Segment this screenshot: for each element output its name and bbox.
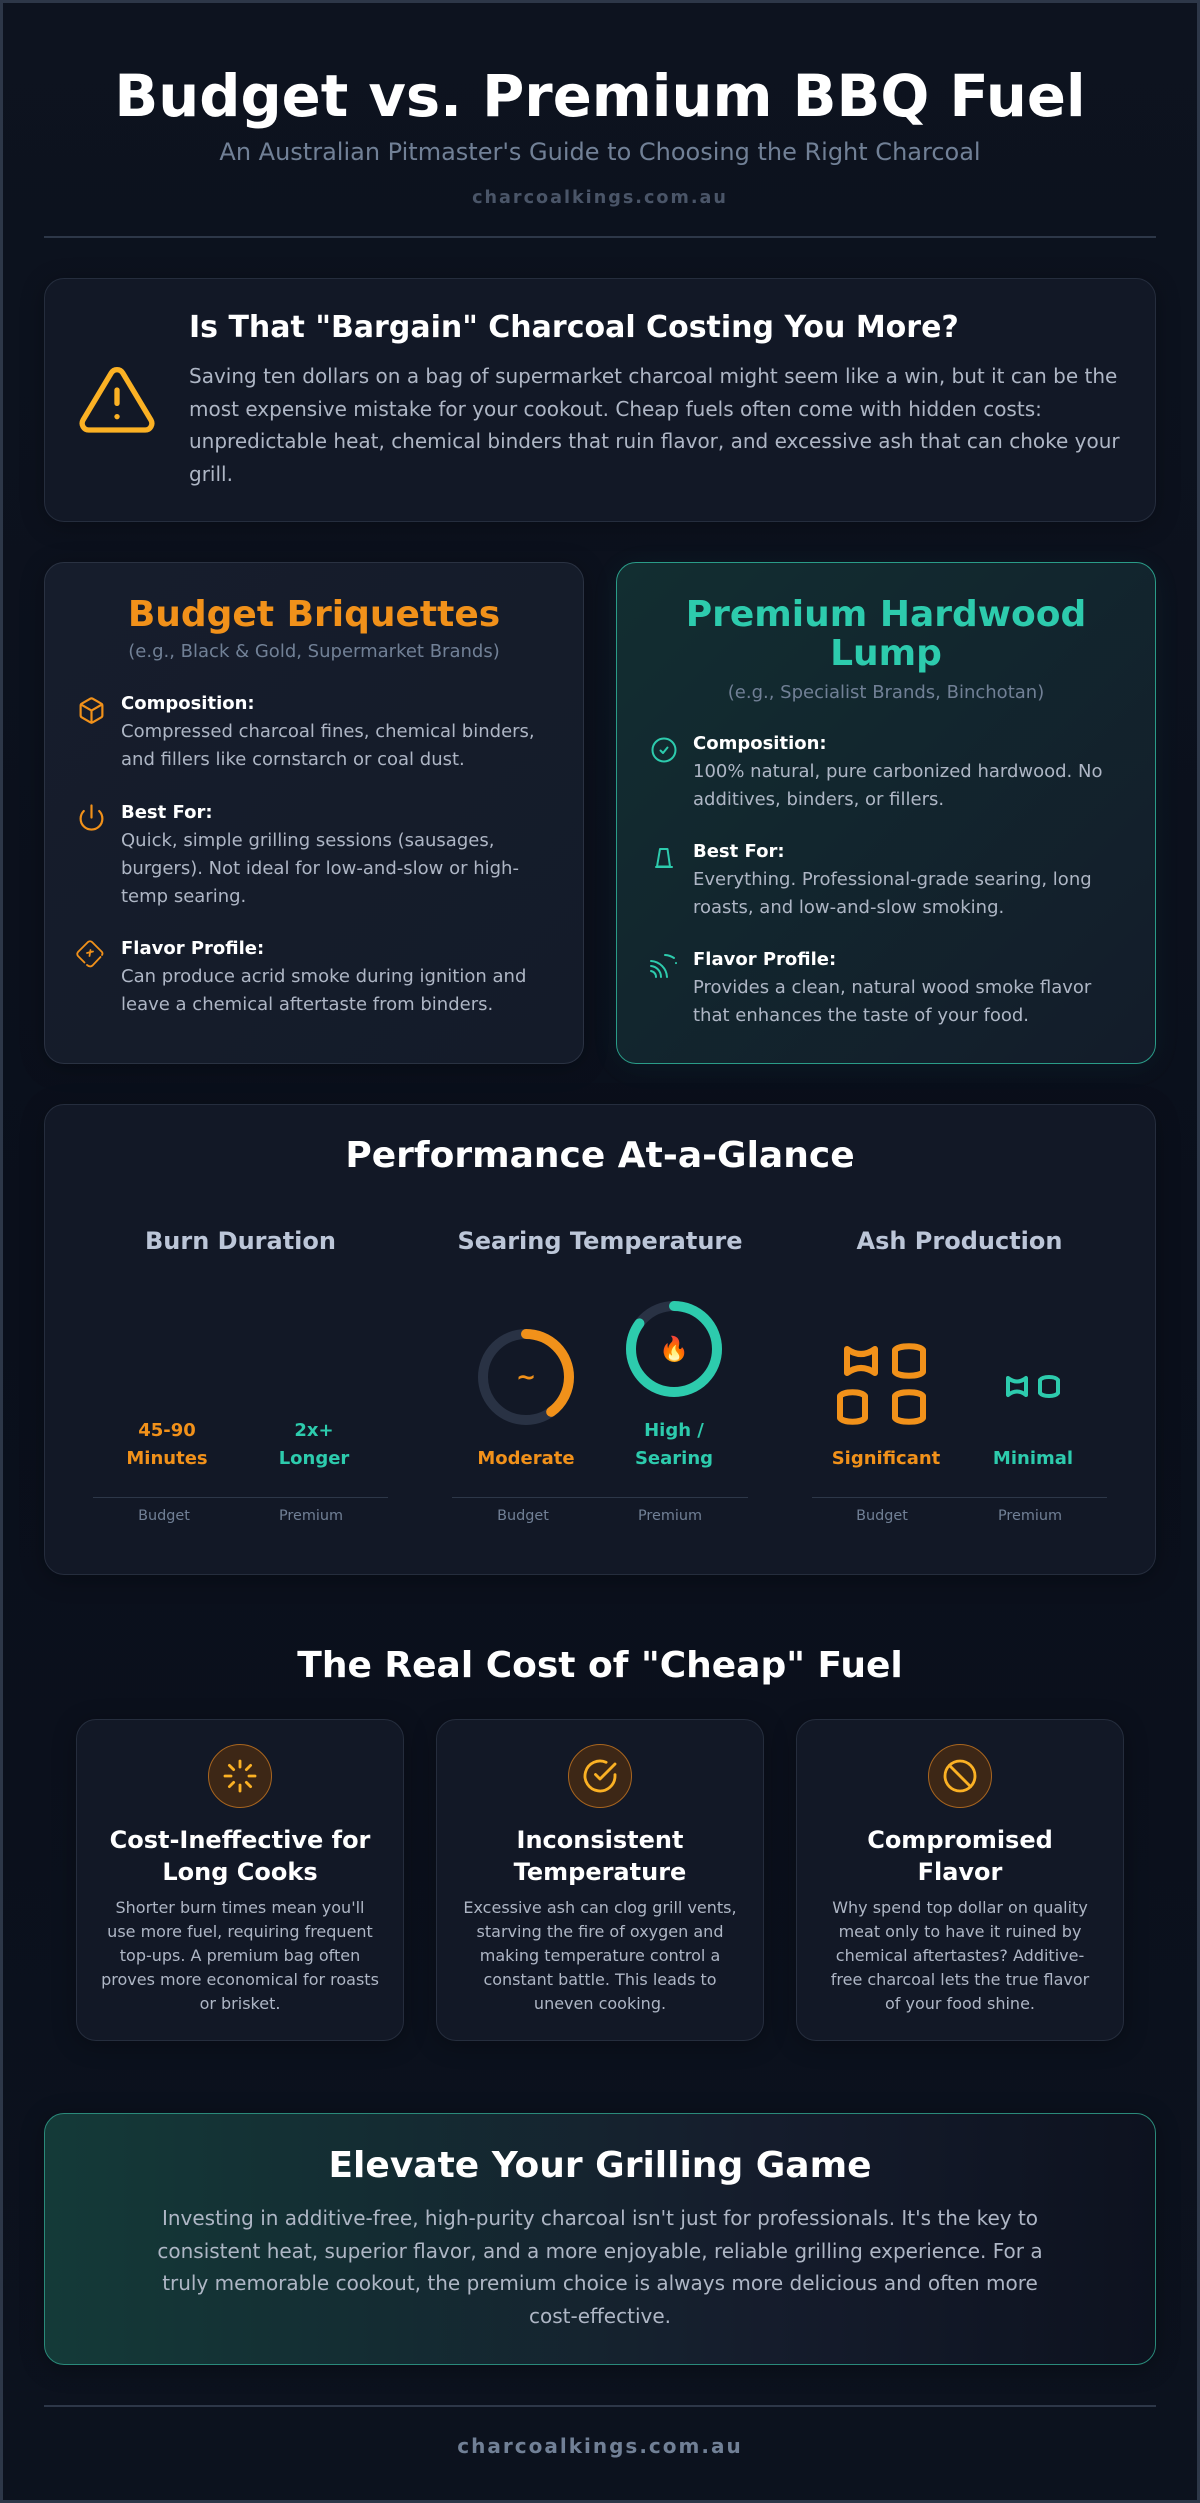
searing premium value [635,1420,713,1469]
card text [831,1898,1090,2013]
card text: chemical aftertastes? Additive- [836,1946,1084,1965]
panel: premium hardwood lump [616,562,1156,1064]
burn premium value [279,1420,350,1469]
card text: Excessive ash can clog grill vents, [463,1898,737,1917]
panel: performance at-a-glance [44,1104,1156,1575]
cta text: cost-effective. [529,2304,671,2328]
icon: power [80,804,104,831]
burn budget value [126,1420,208,1469]
icon: slash circle [928,1744,992,1808]
intro text: most expensive mistake for your cookout. Cheap fuels often come with hidden costs: [189,396,1042,420]
card heading [110,1826,370,1886]
flavor text: that enhances the taste of your food. [693,1005,1029,1026]
premium item: best for [655,841,1092,918]
chart: ash production [812,1227,1107,1524]
card heading: Compromised [867,1826,1053,1854]
premium item: flavor [650,949,1092,1026]
panel: call to action [44,2113,1156,2365]
performance heading: Performance At-a-Glance [345,1135,855,1176]
best for text: temp searing. [121,886,246,907]
flavor text: Can produce acrid smoke during ignition and [121,966,526,987]
panel: inconsistent temperature [436,1719,764,2041]
premium heading [686,594,1086,674]
panel: cost-ineffective [76,1719,404,2041]
panel: compromised flavor [796,1719,1124,2041]
premium heading: Lump [830,633,942,674]
ash heading: Ash Production [856,1227,1062,1255]
card text: top-ups. A premium bag often [120,1946,360,1965]
subtitle: An Australian Pitmaster's Guide to Choosing the Right Charcoal [219,138,981,166]
card text: proves more economical for roasts [101,1970,379,1989]
card text: meat only to have it ruined by [839,1922,1081,1941]
card text: use more fuel, requiring frequent [107,1922,373,1941]
card text [101,1898,379,2013]
gauge: premium high [626,1301,722,1397]
icon: box [80,697,104,724]
icon: loader [208,1744,272,1808]
website label: charcoalkings.com.au [472,188,728,208]
icon: smoke waves [650,954,677,978]
icon: check circle [652,738,676,762]
budget item: flavor [76,938,526,1015]
icon: budget ash chunks [837,1343,926,1425]
gauge symbol: flame: 🔥 [659,1335,689,1363]
card heading: Inconsistent [517,1826,683,1854]
burn budget value: 45-90 [138,1420,196,1441]
flavor text: Flavor Profile: [121,938,264,959]
card heading [867,1826,1053,1886]
best for text: Best For: [693,841,785,862]
burn budget label: Budget [138,1508,190,1524]
intro heading: Is That "Bargain" Charcoal Costing You More? [189,310,959,345]
card text: of your food shine. [885,1994,1035,2013]
card text: free charcoal lets the true flavor [831,1970,1089,1989]
intro text: Saving ten dollars on a bag of supermarket charcoal might seem like a win, but it can be the [189,364,1117,388]
gauge: budget moderate [478,1329,574,1425]
composition text: Composition: [693,733,827,754]
searing premium value: Searing [635,1448,713,1469]
searing premium value: High / [644,1420,704,1441]
footer website: charcoalkings.com.au [457,2434,743,2458]
premium heading: Premium Hardwood [686,594,1086,635]
card text: making temperature control a [480,1946,720,1965]
ash budget value: Significant [832,1448,940,1469]
composition text: Composition: [121,693,255,714]
budget heading: Budget Briquettes [128,594,500,635]
chart: burn duration [93,1227,388,1524]
card text: Shorter burn times mean you'll [116,1898,364,1917]
cta heading: Elevate Your Grilling Game [328,2145,872,2186]
composition text [121,693,535,770]
premium item: composition [652,733,1102,810]
ash premium value: Minimal [993,1448,1073,1469]
best for text: Quick, simple grilling sessions (sausages, [121,830,494,851]
icon: warning triangle [79,367,155,433]
panel: intro warning [44,278,1156,522]
flavor text: leave a chemical aftertaste from binders. [121,994,493,1015]
premium subheading: (e.g., Specialist Brands, Binchotan) [728,682,1044,703]
card heading: Flavor [918,1858,1002,1886]
title: Budget vs. Premium BBQ Fuel [114,63,1086,130]
searing budget label: Budget [497,1508,549,1524]
cta text: Investing in additive-free, high-purity charcoal isn't just for professionals. It's the key to [162,2206,1038,2230]
intro text: grill. [189,462,233,486]
ash budget label: Budget [856,1508,908,1524]
burn budget value: Minutes [126,1448,208,1469]
intro text [189,364,1120,486]
best for text [693,841,1092,918]
budget item: composition [80,693,535,770]
composition text: and fillers like cornstarch or coal dust. [121,749,465,770]
burn premium value: 2x+ [294,1420,334,1441]
icon: tapered beaker [655,848,673,868]
real cost heading: The Real Cost of "Cheap" Fuel [297,1645,903,1686]
searing premium label: Premium [638,1508,702,1524]
card text: starving the fire of oxygen and [477,1922,723,1941]
burn premium label: Premium [279,1508,343,1524]
best for text [121,802,519,907]
gauge symbol: moderate: ~ [516,1363,536,1391]
best for text: burgers). Not ideal for low-and-slow or high- [121,858,519,879]
composition text: additives, binders, or fillers. [693,789,944,810]
burn premium value: Longer [279,1448,349,1469]
searing heading: Searing Temperature [457,1227,743,1255]
cta text [157,2206,1043,2328]
composition text: 100% natural, pure carbonized hardwood. No [693,761,1102,782]
icon: check circle [568,1744,632,1808]
flavor text: Provides a clean, natural wood smoke flavor [693,977,1091,998]
flavor text [121,938,526,1015]
chart: searing temperature [452,1227,748,1524]
card text: constant battle. This leads to [483,1970,717,1989]
icon: diamond mark [76,940,104,968]
best for text: Best For: [121,802,213,823]
composition text [693,733,1102,810]
cta text: truly memorable cookout, the premium choice is always more delicious and often more [162,2271,1038,2295]
burn heading: Burn Duration [145,1227,336,1255]
ash premium label: Premium [998,1508,1062,1524]
card heading [514,1826,686,1886]
best for text: roasts, and low-and-slow smoking. [693,897,1004,918]
card heading: Long Cooks [162,1858,318,1886]
flavor text [693,949,1092,1026]
card heading: Temperature [514,1858,686,1886]
composition text: Compressed charcoal fines, chemical binders, [121,721,535,742]
card text: Why spend top dollar on quality [832,1898,1088,1917]
card text [463,1898,737,2013]
flavor text: Flavor Profile: [693,949,836,970]
best for text: Everything. Professional-grade searing, long [693,869,1092,890]
budget subheading: (e.g., Black & Gold, Supermarket Brands) [128,641,500,662]
budget item: best for [80,802,519,907]
panel: budget briquettes [44,562,584,1064]
cta text: consistent heat, superior flavor, and a more enjoyable, reliable grilling experience. For a [157,2239,1043,2263]
icon: premium ash chunks [1006,1375,1060,1398]
intro text: unpredictable heat, chemical binders that ruin flavor, and excessive ash that can choke your [189,429,1120,453]
card heading: Cost-Ineffective for [110,1826,370,1854]
card text: uneven cooking. [534,1994,666,2013]
card text: or brisket. [200,1994,280,2013]
searing budget value: Moderate [477,1448,575,1469]
